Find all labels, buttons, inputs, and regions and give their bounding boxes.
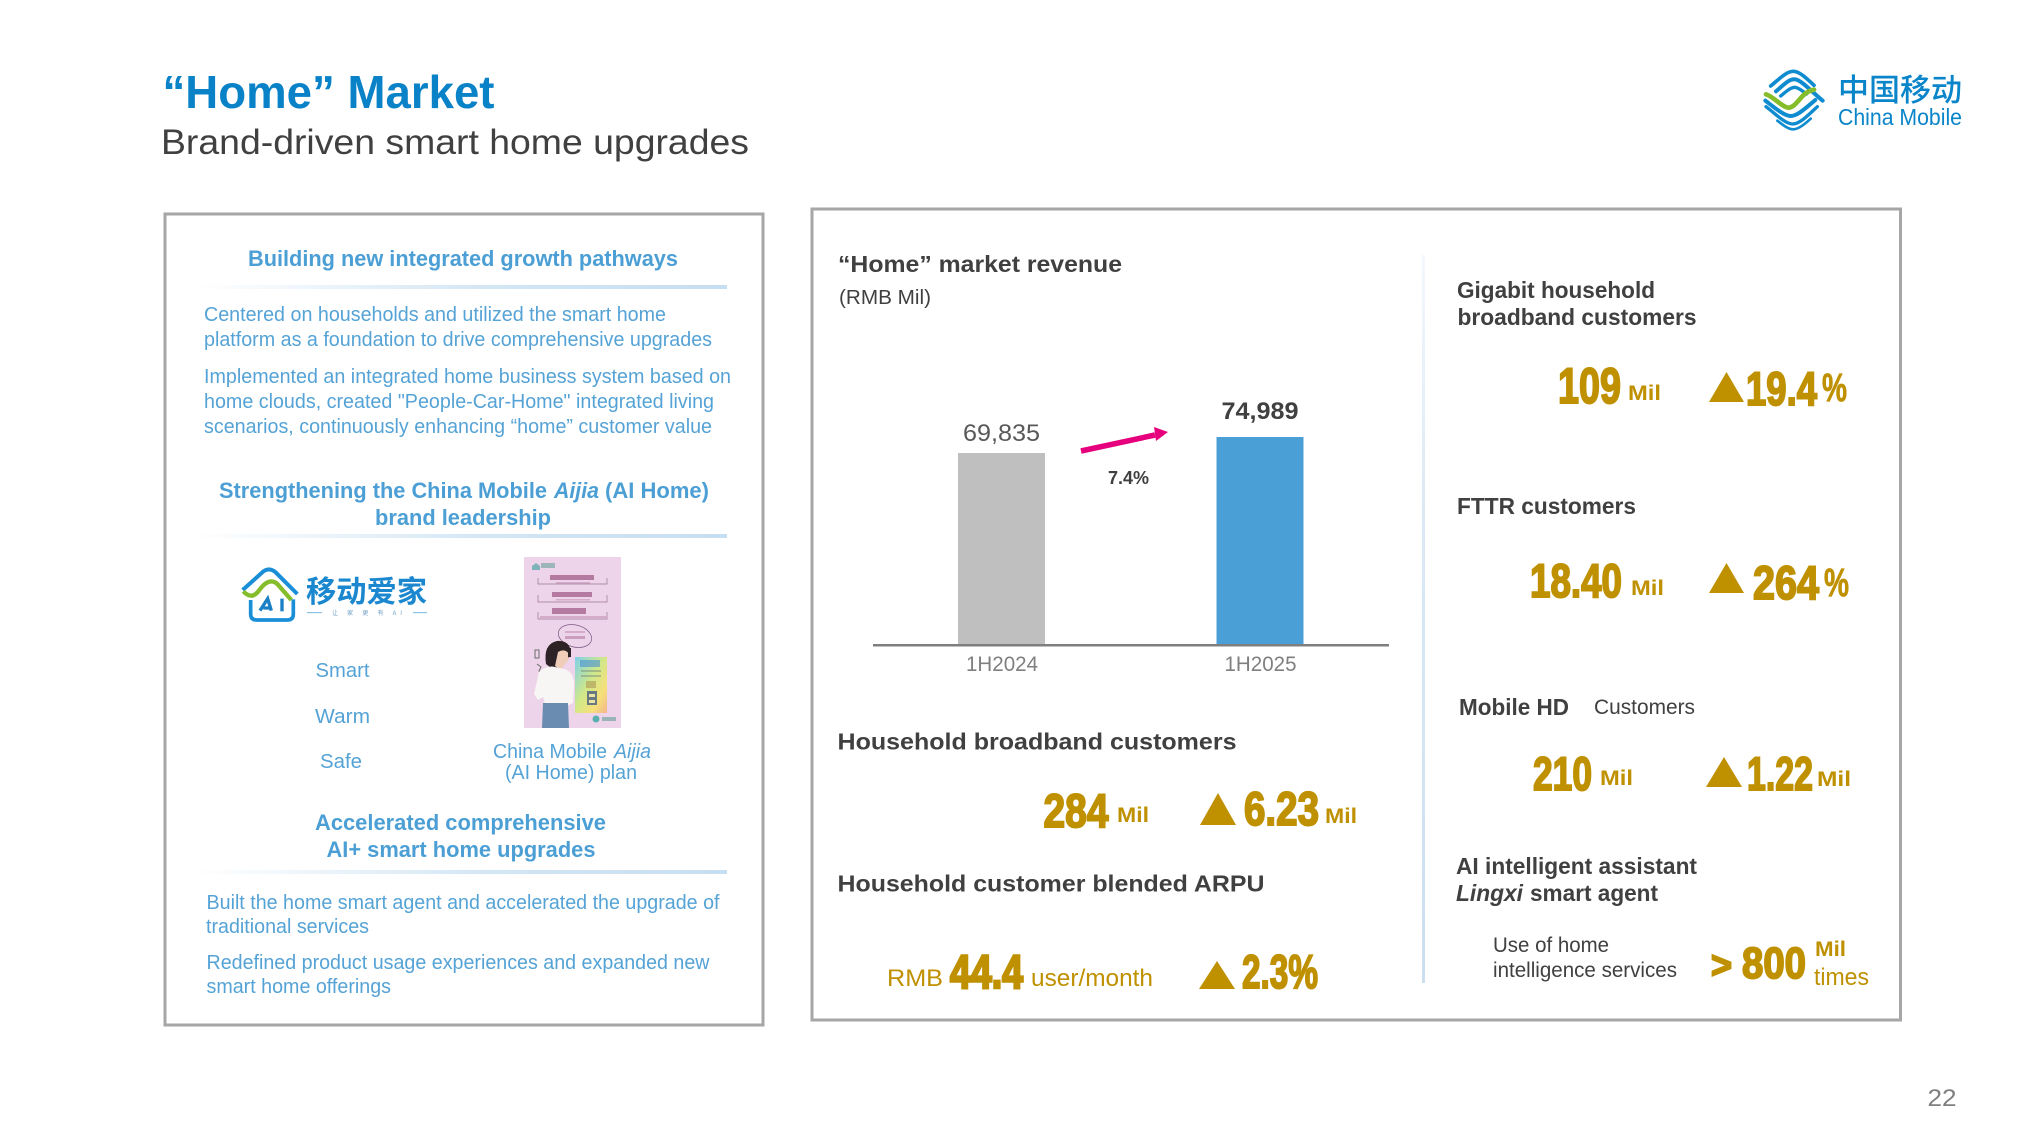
metric: AI assistant Lingxi: Use of home xyxy=(1493,934,1609,957)
metric: Mobile HD customers: Mil xyxy=(1600,767,1633,790)
logo: China Mobile xyxy=(1765,65,1962,130)
text block: brand attributes xyxy=(315,660,370,773)
text block: third point xyxy=(206,892,720,938)
metric: AI assistant Lingxi: > xyxy=(1711,945,1732,987)
metric: AI assistant Lingxi xyxy=(1456,853,1869,991)
logo text: Aijia Chinese name: 移动爱家 xyxy=(306,567,427,611)
metric: AI assistant Lingxi: times xyxy=(1814,964,1869,991)
text block: first point xyxy=(204,304,712,351)
metric: gigabit household broadband: broadband customers xyxy=(1458,304,1696,330)
metric: Mobile HD customers: Mil xyxy=(1817,768,1851,791)
heading: brand leadership xyxy=(219,478,709,530)
metric: FTTR customers xyxy=(1457,493,1849,609)
metric: gigabit household broadband: % xyxy=(1822,366,1847,410)
metric: Mobile HD customers xyxy=(1459,694,1851,800)
metric: AI assistant Lingxi: intelligence services xyxy=(1493,959,1677,982)
heading: brand leadership: Aijia xyxy=(553,478,599,503)
metric: Mobile HD customers: Mobile HD xyxy=(1459,694,1569,720)
caption: Aijia plan: China Mobile xyxy=(493,741,607,763)
bar chart: revenue xyxy=(873,398,1389,676)
unit label: (RMB Mil) xyxy=(839,287,931,309)
logo text: Aijia slogan: 让 家 更 有 AI xyxy=(332,608,402,617)
metric: FTTR customers: 18.40 xyxy=(1530,554,1622,607)
axis label: 1H2025: 1H2025 xyxy=(1224,653,1296,676)
text block: brand attributes: Warm xyxy=(315,706,370,728)
subtitle: Brand-driven smart home upgrades xyxy=(161,123,749,162)
logo: Aijia AI Home xyxy=(243,567,427,620)
caption: Aijia plan xyxy=(493,741,651,784)
metric: FTTR customers: % xyxy=(1824,561,1849,605)
text block: third point: traditional services xyxy=(206,916,369,938)
metric: gigabit household broadband: 109 xyxy=(1558,358,1621,414)
text block: first point: Centered on households and utilized the smart home xyxy=(204,304,666,326)
metric: blended ARPU: 44.4 xyxy=(950,945,1023,998)
metric: blended ARPU xyxy=(838,870,1318,998)
metric: AI assistant Lingxi: AI intelligent assistant xyxy=(1456,853,1697,879)
panel: right metrics panel xyxy=(812,209,1900,1020)
metric: household broadband customers: Mil xyxy=(1117,804,1149,827)
heading: brand leadership: (AI Home) xyxy=(605,478,709,503)
arrow: growth xyxy=(1081,427,1168,451)
icon: China Mobile emblem xyxy=(1765,71,1823,129)
text block: second point: home clouds, created "People-Car-Home" integrated living xyxy=(204,391,714,413)
metric: blended ARPU: user/month xyxy=(1031,965,1153,992)
caption: Aijia plan: Aijia xyxy=(613,741,651,763)
metric: household broadband customers xyxy=(838,728,1357,837)
text block: brand attributes: Safe xyxy=(320,751,362,773)
bar: 1H2024 xyxy=(958,453,1045,645)
title: “Home” Market xyxy=(162,66,494,118)
metric: AI assistant Lingxi: smart agent xyxy=(1530,880,1658,906)
text block: third point: Built the home smart agent and accelerated the upgrade of xyxy=(206,892,720,914)
metric: FTTR customers: Mil xyxy=(1631,577,1664,600)
heading: brand leadership: Strengthening the China Mobile xyxy=(219,478,547,503)
metric: Mobile HD customers: Customers xyxy=(1594,696,1695,719)
value: 1H2025: 74,989 xyxy=(1222,398,1298,425)
text block: fourth point: Redefined product usage experiences and expanded new xyxy=(206,952,710,974)
metric: AI assistant Lingxi: Lingxi xyxy=(1456,880,1524,906)
text block: second point: scenarios, continuously enhancing “home” customer value xyxy=(204,416,712,438)
metric: gigabit household broadband: 19.4 xyxy=(1746,362,1817,415)
image: Aijia plan poster xyxy=(524,557,621,728)
heading: growth pathways: Building new integrated growth pathways xyxy=(248,246,678,271)
metric: household broadband customers: Household broadband customers xyxy=(838,728,1236,754)
text block: first point: platform as a foundation to drive comprehensive upgrades xyxy=(204,329,712,351)
heading: brand leadership: brand leadership xyxy=(375,505,551,530)
panel: left strategy panel xyxy=(165,214,763,1025)
card xyxy=(575,657,607,713)
person xyxy=(545,641,571,672)
metric: AI assistant Lingxi: Mil xyxy=(1815,938,1846,961)
axis label: 1H2024: 1H2024 xyxy=(966,653,1038,676)
logo text: Chinese name: 中国移动 xyxy=(1838,65,1962,110)
metric: AI assistant Lingxi: 800 xyxy=(1742,939,1806,988)
text block: second point xyxy=(204,366,731,438)
icon: AI house xyxy=(243,569,297,620)
growth value: 7.4% xyxy=(1108,468,1149,488)
heading: AI+ upgrades: Accelerated comprehensive xyxy=(315,810,606,835)
logo text: English name: China Mobile xyxy=(1838,104,1962,130)
text block: second point: Implemented an integrated home business system based on xyxy=(204,366,731,388)
metric: blended ARPU: 2.3% xyxy=(1242,945,1318,998)
bar: 1H2025 xyxy=(1216,437,1304,645)
metric: gigabit household broadband: Mil xyxy=(1628,382,1661,405)
metric: household broadband customers: 284 xyxy=(1044,784,1108,837)
metric: gigabit household broadband xyxy=(1457,277,1847,415)
metric: FTTR customers: 264 xyxy=(1753,556,1819,609)
metric: household broadband customers: 6.23 xyxy=(1244,782,1319,835)
text block: fourth point: smart home offerings xyxy=(206,976,391,998)
text block: fourth point xyxy=(206,952,710,998)
heading: AI+ upgrades xyxy=(315,810,606,862)
text block: brand attributes: Smart xyxy=(316,660,370,682)
metric: Mobile HD customers: 1.22 xyxy=(1747,747,1813,800)
metric: household broadband customers: Mil xyxy=(1325,805,1357,828)
metric: blended ARPU: Household customer blended ARPU xyxy=(838,870,1264,896)
heading: AI+ upgrades: AI+ smart home upgrades xyxy=(326,837,596,862)
metric: blended ARPU: RMB xyxy=(887,965,943,992)
value: 1H2024: 69,835 xyxy=(963,420,1040,447)
caption: Aijia plan: (AI Home) plan xyxy=(505,762,637,784)
metric: Mobile HD customers: 210 xyxy=(1533,747,1592,800)
metric: gigabit household broadband: Gigabit household xyxy=(1457,277,1655,303)
page number: 22 xyxy=(1928,1085,1956,1112)
heading: Home market revenue: “Home” market revenue xyxy=(838,251,1122,277)
metric: FTTR customers: FTTR customers xyxy=(1457,493,1636,519)
